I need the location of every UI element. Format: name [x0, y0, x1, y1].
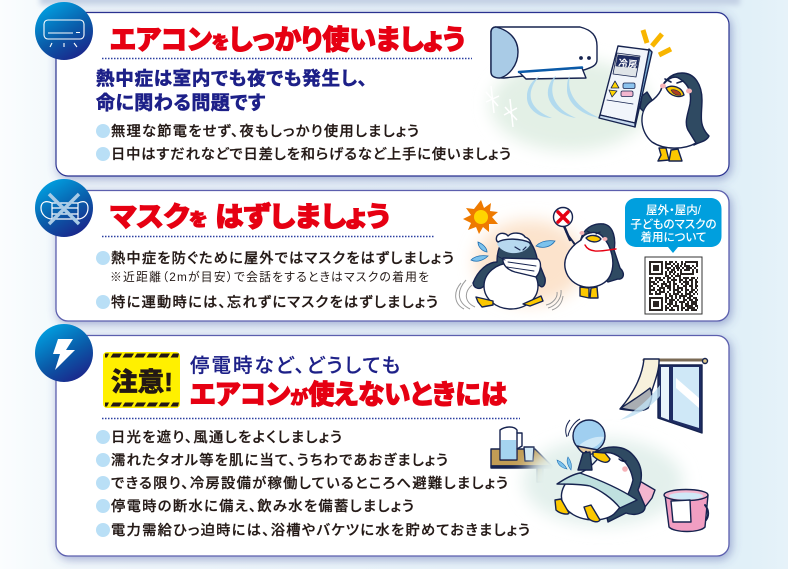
bullet list 3: 日光を遮り、風通しをよくしましょう [111, 429, 342, 446]
penguin [640, 73, 709, 161]
card 2 [56, 190, 729, 321]
caution badge: 注意! [111, 367, 173, 397]
illustration: table with pitcher [491, 427, 552, 482]
callout: mask usage information [625, 198, 722, 253]
bullet list 3: 電力需給ひっ迫時には、浴槽やバケツに水を貯めておきましょう [111, 521, 530, 539]
bullet list 1: 日中はすだれなどで日差しを和らげるなど上手に使いましょう [111, 146, 511, 163]
card 1 [56, 12, 729, 176]
icon: lightning bolt [35, 324, 93, 382]
panel: when the air conditioner cannot be used [35, 324, 729, 556]
icon: air conditioner [35, 2, 93, 60]
subheading 1: 熱中症は室内でも夜でも発生し、 [96, 68, 367, 89]
bullet list 2: ※近距離（2mが目安）で会話をするときはマスクの着用を [110, 270, 429, 284]
bullet list 3 [96, 429, 530, 539]
sun [463, 200, 498, 234]
callout: mask usage information: 屋外・屋内/ [646, 203, 702, 217]
fan motion lines [566, 419, 580, 437]
heading 1: エアコンをしっかり使いましょう [110, 24, 465, 55]
heading 2: マスクを はずしましょう [110, 201, 390, 232]
bullet list 3: 停電時の断水に備え、飲み水を備蓄しましょう [111, 498, 414, 515]
bullet list 3: できる限り、冷房設備が稼働しているところへ避難しましょう [111, 474, 508, 492]
pillow [630, 480, 655, 507]
illustration: penguins in the sun [456, 200, 623, 310]
subheading 1: 命に関わる問題です [96, 92, 265, 114]
panel: use the air conditioner [35, 2, 729, 176]
motion lines [456, 280, 563, 310]
bucket [664, 490, 708, 532]
sparkles [486, 86, 517, 127]
illustration: window [620, 358, 708, 433]
cold air streams [527, 76, 600, 118]
bullet list 1: 無理な節電をせず、夜もしっかり使用しましょう [111, 122, 419, 140]
water drops [557, 457, 571, 470]
callout: mask usage information: 着用について [641, 230, 706, 244]
panel: remove masks [35, 179, 729, 321]
heading 3 [190, 355, 507, 410]
heading 3: 停電時など、どうしても [190, 355, 400, 377]
attention marks [643, 30, 671, 55]
bullet list 2: 熱中症を防ぐために屋外ではマスクをはずしましょう [111, 250, 454, 267]
fan [573, 420, 605, 470]
illustration: air conditioner and penguin with remote [486, 27, 709, 161]
caution badge [103, 352, 180, 408]
icon: crossed-out mask [35, 179, 93, 237]
illustration: resting penguin with fan and bucket [523, 419, 708, 532]
illustration: air conditioner and penguin with remote: 冷房 [618, 57, 638, 71]
sweat drops [471, 241, 555, 261]
air conditioner unit [491, 27, 597, 79]
card 3 [56, 336, 729, 556]
remote control [599, 46, 652, 127]
running penguin with mask [473, 233, 545, 309]
bullet list 3: 濡れたタオル等を肌に当て、うちわであおぎましょう [111, 451, 448, 469]
callout: mask usage information: 子どものマスクの [630, 218, 717, 231]
penguin body [555, 447, 645, 522]
whistle penguin [565, 224, 623, 298]
heading 3: エアコンが使えないときには [190, 380, 507, 410]
QR code [645, 257, 702, 314]
subheading 1 [96, 68, 367, 114]
stop sign [554, 208, 572, 240]
bullet list 1 [96, 122, 511, 163]
bullet list 2 [96, 250, 454, 311]
bullet list 2: 特に運動時には、忘れずにマスクをはずしましょう [111, 294, 438, 311]
